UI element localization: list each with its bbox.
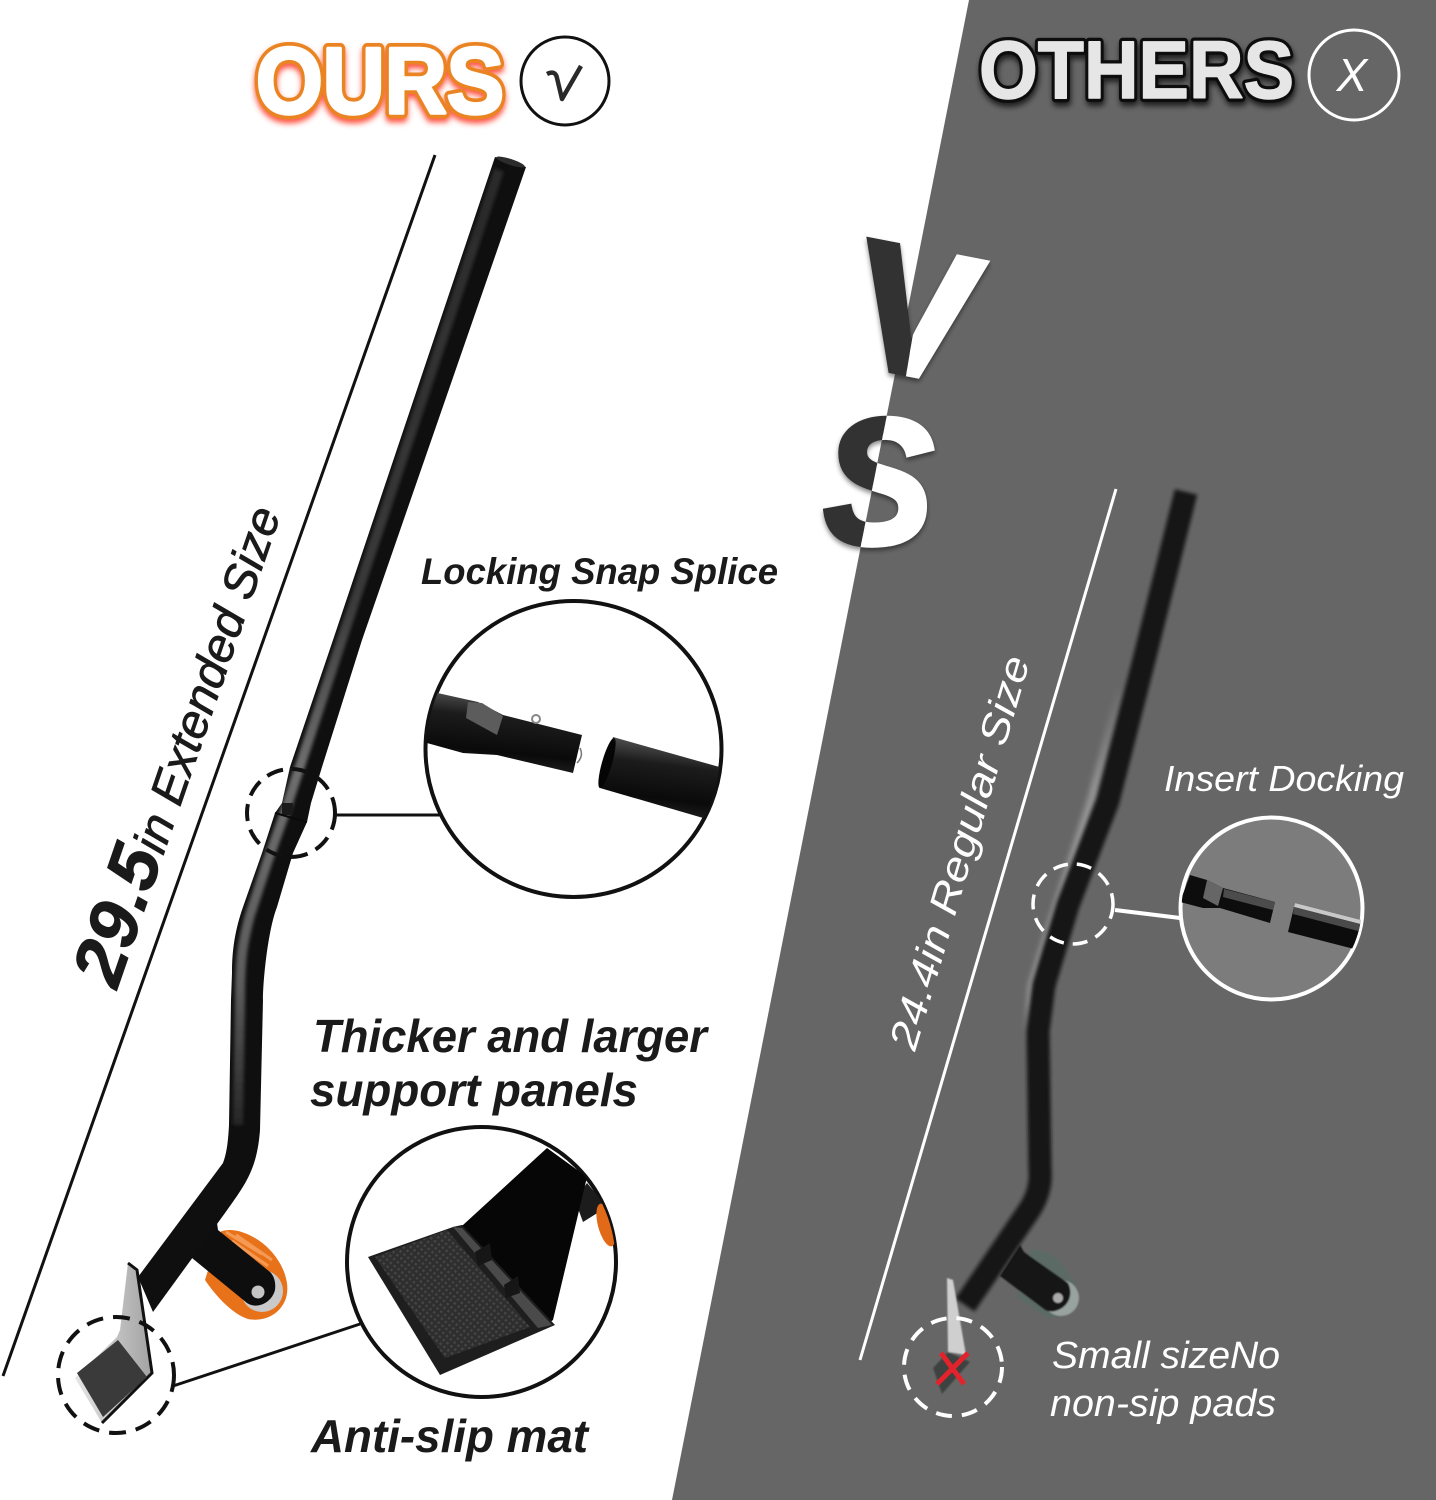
VS badge: S	[824, 383, 933, 582]
dashed marker: insert docking	[1033, 864, 1113, 944]
VS badge: S	[824, 383, 933, 582]
VS badge: V	[839, 203, 993, 421]
label: Locking Snap Splice: Locking Snap Splice	[421, 551, 778, 592]
callout: locking snap splice detail	[420, 601, 730, 897]
icon: red cross on foot	[937, 1353, 968, 1384]
heading: OURS: OURS	[256, 28, 504, 133]
icon: cross in circle: X	[1336, 49, 1370, 101]
icon: cross in circle	[1309, 30, 1399, 120]
label: Thicker and larger support panels	[310, 1010, 709, 1116]
dashed marker: foot	[904, 1318, 1002, 1416]
VS badge	[820, 236, 990, 553]
handle top opening	[495, 155, 526, 169]
foot plate	[75, 1263, 152, 1423]
VS badge: V	[839, 203, 993, 421]
handle highlight	[1028, 690, 1120, 1040]
label: Small size No non-slip pads: Small sizeNo	[1052, 1335, 1280, 1377]
heading: OURS: OURS	[256, 28, 504, 133]
icon: check mark in circle	[521, 37, 609, 125]
foot plate: others	[933, 1278, 970, 1394]
dashed marker: snap splice	[247, 769, 335, 857]
connector: splice to callout	[335, 814, 440, 816]
dashed marker: foot plate	[58, 1317, 174, 1433]
dimension line: ours	[3, 155, 435, 1376]
product: others regular handle	[965, 492, 1186, 1317]
connector: foot plate to callout	[173, 1324, 360, 1386]
dimension label: 24.4in Regular Size: 24.4in Regular Size	[881, 651, 1039, 1056]
heading: OTHERS: OTHERS	[979, 25, 1294, 116]
label: Anti-slip mat: Anti-slip mat	[310, 1410, 590, 1462]
callout: insert docking detail	[1180, 818, 1365, 1000]
dimension label: 29.5in Extended Size: 29.5in Extended Size	[57, 493, 296, 997]
dimension line: others	[860, 489, 1116, 1360]
handle tube	[965, 492, 1186, 1305]
label: Small size No non-slip pads: non-sip pads	[1050, 1383, 1276, 1425]
product: ours extended handle with wheel	[75, 150, 530, 1423]
label: Small size No non-slip pads	[1050, 1335, 1280, 1425]
heading: OTHERS: OTHERS	[979, 25, 1294, 116]
wheel	[1000, 1245, 1079, 1317]
label: Thicker and larger support panels: support panels	[310, 1064, 638, 1116]
label: Thicker and larger support panels: Thicker and larger	[313, 1010, 709, 1062]
handle tube	[130, 150, 530, 1320]
label: Insert Docking: Insert Docking	[1164, 758, 1404, 799]
joint collar	[275, 803, 307, 822]
callout: support panel detail	[347, 1127, 619, 1397]
connector: docking to callout	[1115, 910, 1180, 918]
wheel: orange roller	[192, 1216, 287, 1320]
background: gray diagonal right panel	[672, 0, 1436, 1500]
